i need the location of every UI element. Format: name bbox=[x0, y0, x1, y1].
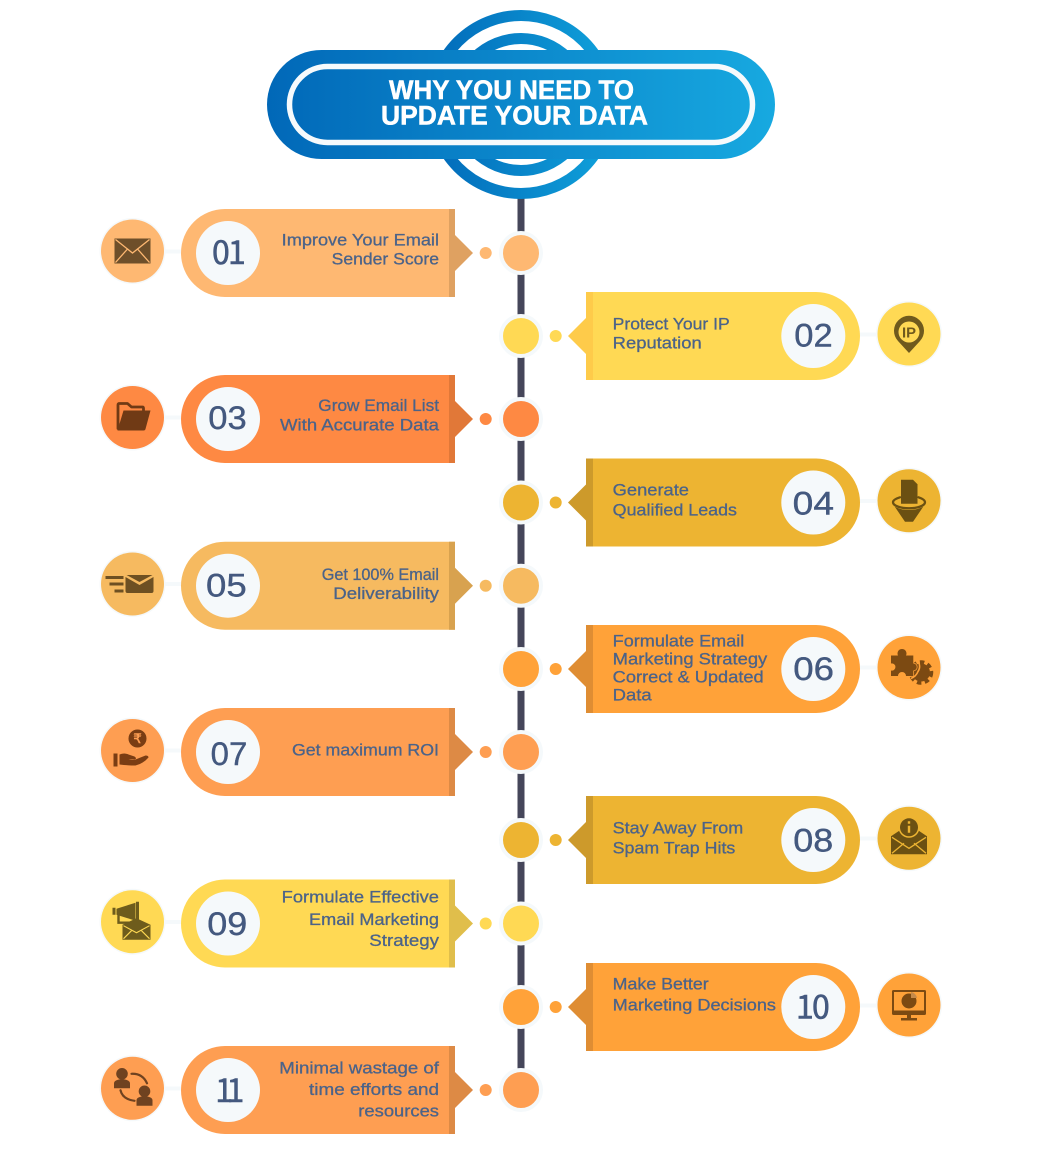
step 05 text bbox=[322, 565, 440, 603]
step 08 text: Stay Away From bbox=[613, 818, 743, 837]
banner pill bbox=[267, 50, 775, 159]
step 04 card bbox=[586, 458, 860, 546]
step 08 node bbox=[501, 820, 541, 860]
step 09 text: Formulate Effective bbox=[282, 888, 439, 907]
step 03 connector bbox=[160, 416, 184, 420]
title text: UPDATE YOUR DATA bbox=[381, 100, 648, 130]
icon: fast mail bbox=[100, 551, 166, 617]
step 07 node bbox=[501, 732, 541, 772]
step 08 connector bbox=[858, 836, 882, 840]
step 03 text: Grow Email List bbox=[318, 396, 439, 415]
step 01 text: Sender Score bbox=[332, 250, 439, 269]
step 04 dot bbox=[550, 496, 562, 508]
banner inner outline bbox=[290, 66, 752, 142]
step 05 text: Get 100% Email bbox=[322, 565, 439, 584]
step 03 node bbox=[501, 399, 541, 439]
icon: monitor with pie chart bbox=[876, 972, 942, 1038]
step 07 bbox=[100, 708, 541, 796]
step 10 node bbox=[501, 987, 541, 1027]
step 07 number badge: 07 bbox=[211, 736, 247, 772]
step 06 text: Marketing Strategy bbox=[613, 649, 768, 668]
step 02 text bbox=[613, 314, 730, 352]
step 03 bbox=[100, 375, 541, 463]
step 06 text: Formulate Email bbox=[613, 631, 744, 650]
step 07 dot bbox=[480, 746, 492, 758]
step 07 number badge bbox=[196, 720, 260, 784]
step 10 connector bbox=[858, 1004, 882, 1008]
step 01 number badge bbox=[196, 221, 260, 285]
step 11 text: Minimal wastage of bbox=[279, 1059, 439, 1078]
step 03 arrow bbox=[449, 375, 473, 463]
step 05 number badge bbox=[196, 554, 260, 618]
step 02 text: Reputation bbox=[613, 333, 702, 352]
step 09 text: Strategy bbox=[369, 931, 440, 950]
step 07 arrow bbox=[449, 708, 473, 796]
step 02 dot bbox=[550, 330, 562, 342]
step 11 bbox=[100, 1046, 541, 1134]
step 01 node bbox=[501, 233, 541, 273]
step 04 number badge bbox=[781, 470, 845, 534]
icon: hand holding rupee bbox=[100, 718, 166, 784]
step 04 text: Qualified Leads bbox=[613, 501, 737, 520]
step 10 text: Make Better bbox=[613, 974, 709, 993]
step 02 node bbox=[501, 316, 541, 356]
step 02 number badge: 02 bbox=[794, 318, 833, 354]
step 02 number badge bbox=[781, 304, 845, 368]
step 04 node bbox=[501, 482, 541, 522]
step 06 text: Correct & Updated bbox=[613, 667, 764, 686]
step 04 connector bbox=[858, 499, 882, 503]
step 11 connector bbox=[160, 1086, 184, 1090]
step 09 arrow bbox=[449, 880, 473, 968]
step 09 connector bbox=[160, 920, 184, 924]
title text: WHY YOU NEED TO bbox=[389, 75, 634, 105]
step 01 text: Improve Your Email bbox=[282, 231, 439, 250]
step 09 card bbox=[181, 880, 455, 968]
icon: lead funnel bbox=[876, 468, 942, 534]
step 05 number badge: 05 bbox=[206, 568, 247, 604]
step 10 text bbox=[613, 974, 776, 1015]
step 11 dot bbox=[480, 1084, 492, 1096]
step 02 arrow bbox=[568, 292, 593, 380]
step 03 number badge bbox=[196, 387, 260, 451]
step 08 number badge: 08 bbox=[793, 823, 833, 859]
step 08 dot bbox=[550, 834, 562, 846]
step 06 number badge: 06 bbox=[793, 651, 834, 687]
step 01 connector bbox=[160, 250, 184, 254]
step 05 text: Deliverability bbox=[333, 584, 440, 603]
step 05 dot bbox=[480, 580, 492, 592]
step 06 number badge bbox=[781, 637, 845, 701]
title text bbox=[381, 75, 648, 130]
step 02 connector bbox=[858, 332, 882, 336]
step 02 text: Protect Your IP bbox=[613, 314, 730, 333]
icon: hand holding rupee: ₹ bbox=[133, 731, 142, 746]
step 03 number badge: 03 bbox=[208, 400, 247, 436]
step 11 arrow bbox=[449, 1046, 473, 1134]
step 08 text bbox=[613, 818, 743, 857]
step 05 connector bbox=[160, 582, 184, 586]
step 05 node bbox=[501, 566, 541, 606]
step 09 number badge bbox=[196, 892, 260, 956]
step 09 text: Email Marketing bbox=[309, 910, 439, 929]
icon: megaphone and mail bbox=[100, 889, 166, 955]
title banner bbox=[267, 16, 775, 194]
step 11 text bbox=[279, 1059, 439, 1121]
step 10 number badge bbox=[781, 975, 845, 1039]
step 01 bbox=[100, 209, 541, 297]
step 04 text bbox=[613, 481, 737, 520]
icon: IP location pin bbox=[876, 301, 942, 367]
step 09 text bbox=[282, 888, 440, 950]
step 07 text: Get maximum ROI bbox=[292, 741, 439, 760]
step 01 text bbox=[282, 231, 439, 269]
step 08 bbox=[501, 796, 942, 884]
step 04 bbox=[501, 458, 942, 546]
step 01 arrow bbox=[449, 209, 473, 297]
step 06 text bbox=[613, 631, 768, 705]
step 05 arrow bbox=[449, 542, 473, 630]
step 11 number badge: 11 bbox=[215, 1066, 244, 1112]
step 06 dot bbox=[550, 663, 562, 675]
step 06 card bbox=[586, 625, 860, 713]
icon: mail with info bbox=[876, 805, 942, 871]
step 09 number badge: 09 bbox=[207, 906, 247, 942]
step 09 node bbox=[501, 904, 541, 944]
step 04 text: Generate bbox=[613, 481, 689, 500]
step 10 bbox=[501, 963, 942, 1051]
step 01 card bbox=[181, 209, 455, 297]
step 06 node bbox=[501, 649, 541, 689]
step 11 text: resources bbox=[358, 1102, 439, 1121]
concentric circles behind banner bbox=[432, 16, 610, 194]
step 06 bbox=[501, 625, 942, 713]
step 06 arrow bbox=[568, 625, 593, 713]
step 03 dot bbox=[480, 413, 492, 425]
step 10 arrow bbox=[568, 963, 593, 1051]
icon: envelope bbox=[100, 218, 166, 284]
step 06 text: Data bbox=[613, 686, 652, 705]
step 01 number badge: 01 bbox=[212, 228, 246, 274]
step 07 card bbox=[181, 708, 455, 796]
step 03 text: With Accurate Data bbox=[280, 416, 440, 435]
step 07 connector bbox=[160, 748, 184, 752]
step 08 text: Spam Trap Hits bbox=[613, 838, 735, 857]
step 04 arrow bbox=[568, 458, 593, 546]
step 11 node bbox=[501, 1070, 541, 1110]
icon: IP location pin: IP bbox=[902, 324, 916, 342]
step 08 card bbox=[586, 796, 860, 884]
step 11 text: time efforts and bbox=[309, 1080, 439, 1099]
step 11 card bbox=[181, 1046, 455, 1134]
step 10 dot bbox=[550, 1001, 562, 1013]
step 01 dot bbox=[480, 247, 492, 259]
step 09 bbox=[100, 880, 541, 968]
step 10 number badge: 10 bbox=[796, 982, 830, 1028]
step 03 text bbox=[280, 396, 440, 435]
step 04 number badge: 04 bbox=[793, 485, 834, 521]
step 02 card bbox=[586, 292, 860, 380]
step 08 number badge bbox=[781, 808, 845, 872]
step 11 number badge bbox=[196, 1058, 260, 1122]
step 10 text: Marketing Decisions bbox=[613, 996, 776, 1015]
step 08 arrow bbox=[568, 796, 593, 884]
icon: puzzle and gear bbox=[876, 634, 942, 700]
icon: folder bbox=[100, 384, 166, 450]
step 06 connector bbox=[858, 666, 882, 670]
step 09 dot bbox=[480, 918, 492, 930]
timeline spine bbox=[518, 195, 524, 1075]
step 02 bbox=[501, 292, 942, 380]
step 05 card bbox=[181, 542, 455, 630]
step 10 card bbox=[586, 963, 860, 1051]
icon: people exchange bbox=[100, 1055, 166, 1121]
step 05 bbox=[100, 542, 541, 630]
step 03 card bbox=[181, 375, 455, 463]
